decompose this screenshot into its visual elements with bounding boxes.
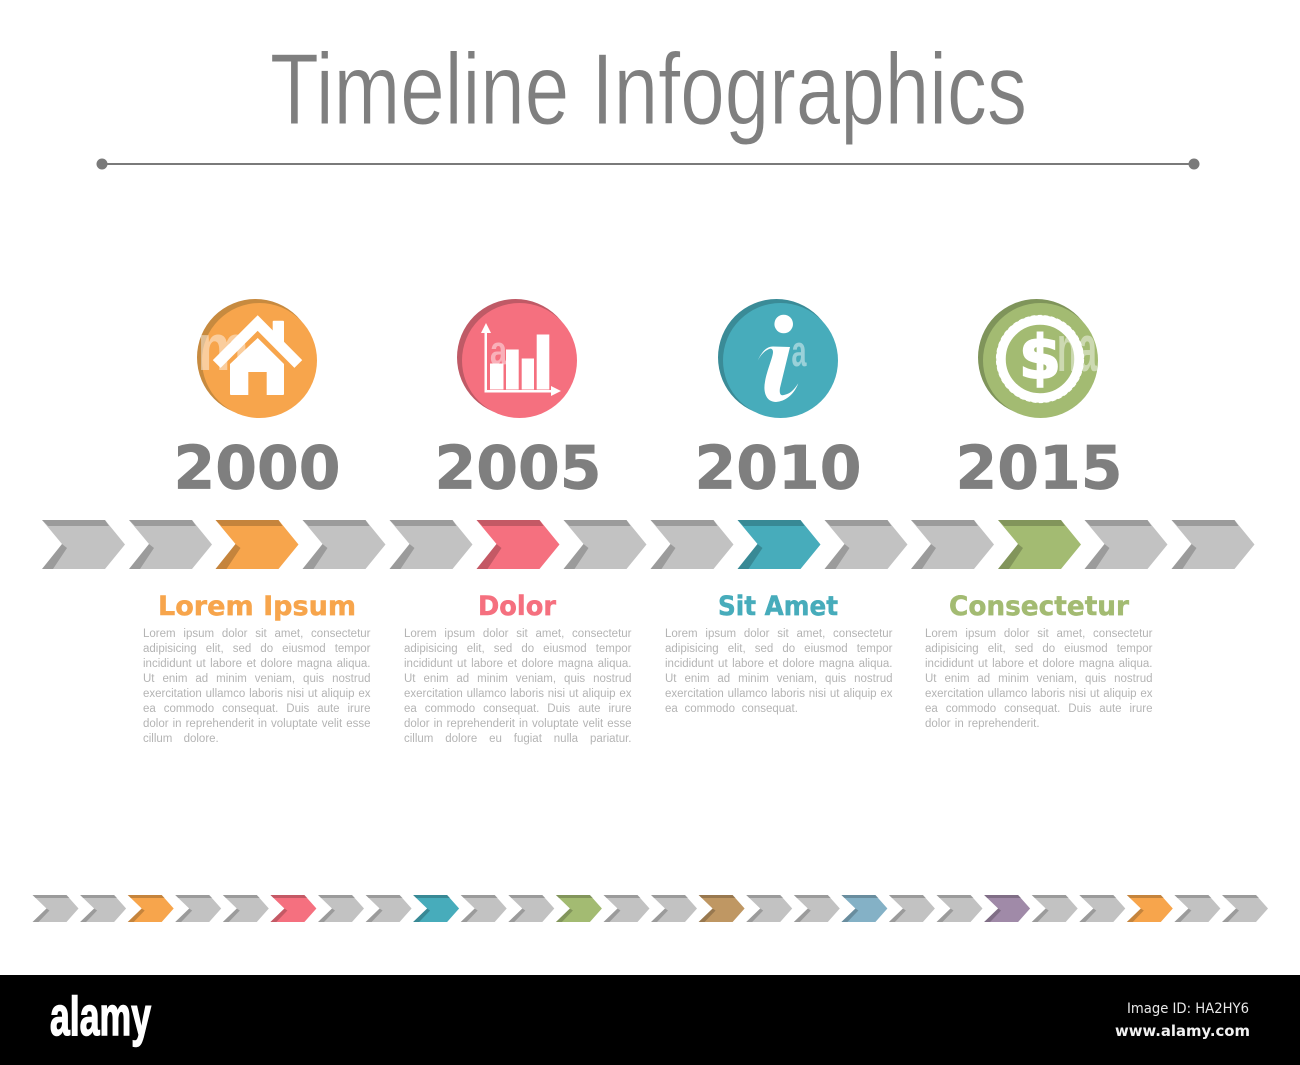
footer url: www.alamy.com [1115, 1022, 1250, 1040]
text block: column 1: dolor in reprehenderit in voluptate velit esse [143, 718, 370, 730]
footer image id: Image ID: HA2HY6 [1127, 1001, 1249, 1017]
icon: house on orange circle [197, 299, 317, 418]
year labels [174, 434, 1122, 504]
text block: column 4: Ut enim ad minim veniam, quis nostrud [925, 673, 1152, 685]
text block: column 4: exercitation ullamco laboris nisi ut aliquip ex [925, 688, 1152, 700]
text block: column 2: ea commodo consequat. Duis aute irure [404, 703, 632, 715]
icon: dollar coin on green circle: na [1057, 311, 1098, 385]
icon: house on orange circle: m [197, 310, 249, 384]
text block: column 1: adipisicing elit, sed do eiusmod tempor [143, 643, 370, 655]
footer bar [0, 975, 1300, 1065]
column headings: Dolor [478, 591, 557, 622]
text block: column 3: ea commodo consequat. [665, 703, 798, 715]
year labels: 2000 [174, 434, 340, 504]
small chevron strip [32, 895, 1268, 922]
text block: column 3: Lorem ipsum dolor sit amet, consectetur [665, 628, 892, 640]
icon: bar chart on pink circle [457, 299, 577, 418]
column headings [158, 591, 1130, 622]
title: Timeline Infographics [270, 34, 1027, 146]
column headings: Sit Amet [718, 591, 838, 622]
main chevron timeline [42, 520, 1254, 569]
text block: column 4: ea commodo consequat. Duis aute irure [925, 703, 1152, 715]
text block: column 2: exercitation ullamco laboris nisi ut aliquip ex [404, 688, 632, 700]
text block: column 2: cillum dolore eu fugiat nulla pariatur. [404, 733, 632, 745]
title divider line [96, 158, 1200, 170]
text block: column 4: Lorem ipsum dolor sit amet, consectetur [925, 628, 1152, 640]
text block: column 4: incididunt ut labore et dolore magna aliqua. [925, 658, 1152, 670]
text block: column 2: adipisicing elit, sed do eiusmod tempor [404, 643, 632, 655]
text block: column 1: Ut enim ad minim veniam, quis nostrud [143, 673, 370, 685]
text block: column 4 [925, 628, 1152, 730]
text block: column 3: Ut enim ad minim veniam, quis nostrud [665, 673, 892, 685]
text block: column 1 [143, 628, 370, 745]
text block: column 3: exercitation ullamco laboris nisi ut aliquip ex [665, 688, 892, 700]
text block: column 2: incididunt ut labore et dolore magna aliqua. [404, 658, 632, 670]
text block: column 3: adipisicing elit, sed do eiusmod tempor [665, 643, 892, 655]
text block: column 2: Ut enim ad minim veniam, quis nostrud [404, 673, 632, 685]
text block: column 2: dolor in reprehenderit in voluptate velit esse [404, 718, 632, 730]
icon: info on teal circle [718, 299, 838, 418]
text block: column 1: incididunt ut labore et dolore magna aliqua. [143, 658, 370, 670]
year labels: 2005 [434, 434, 602, 504]
text block: column 3: incididunt ut labore et dolore magna aliqua. [665, 658, 892, 670]
text block: column 2 [404, 628, 632, 745]
icon: bar chart on pink circle: a [490, 329, 508, 373]
year labels: 2010 [694, 434, 862, 504]
text block: column 1: ea commodo consequat. Duis aute irure [143, 703, 370, 715]
footer logo: alamy [50, 985, 151, 1047]
text block: column 1: cillum dolore. [143, 733, 219, 745]
column headings: Consectetur [949, 591, 1130, 622]
text block: column 1: exercitation ullamco laboris nisi ut aliquip ex [143, 688, 370, 700]
year labels: 2015 [956, 434, 1122, 504]
text block: column 4: adipisicing elit, sed do eiusmod tempor [925, 643, 1152, 655]
text block: column 4: dolor in reprehenderit. [925, 718, 1040, 730]
text block: column 2: Lorem ipsum dolor sit amet, consectetur [404, 628, 632, 640]
text block: column 3 [665, 628, 892, 715]
text block: column 1: Lorem ipsum dolor sit amet, consectetur [143, 628, 370, 640]
icon: info on teal circle: a [792, 327, 807, 376]
icon: dollar coin on green circle: $ [1019, 323, 1061, 393]
column headings: Lorem Ipsum [158, 591, 356, 622]
icon: dollar coin on green circle [978, 299, 1098, 418]
